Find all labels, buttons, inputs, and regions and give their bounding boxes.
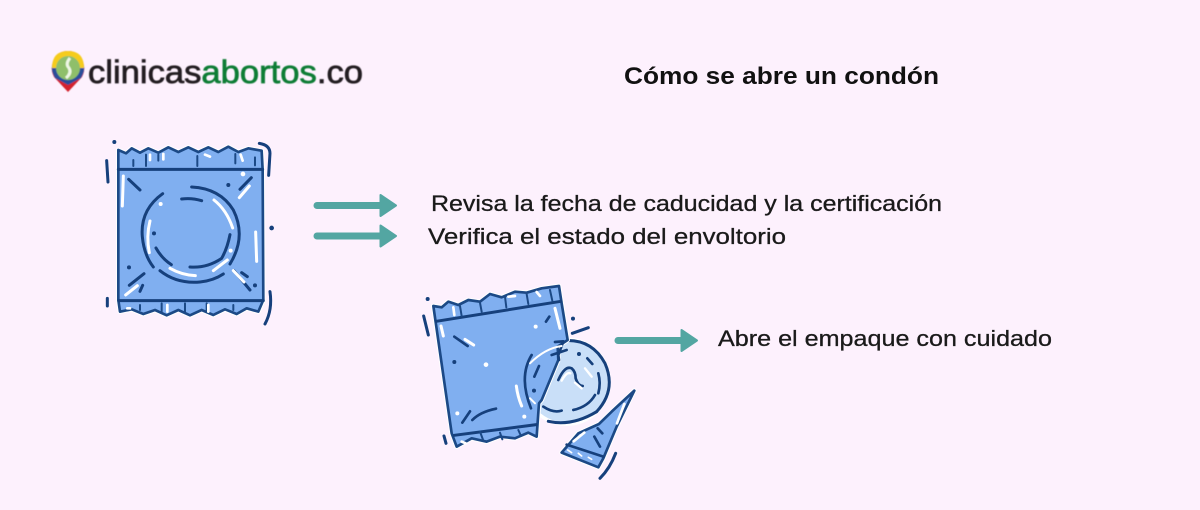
- arrow: estado del envoltorio: [317, 226, 396, 246]
- icon: map pin with Colombian colours: [52, 51, 84, 92]
- arrow: abre el empaque: [618, 330, 697, 351]
- logo: clinicasabortos.co: [52, 51, 363, 92]
- motion marks: [424, 316, 616, 478]
- torn corner: [562, 391, 634, 467]
- text: step 1: Revisa la fecha de caducidad y la certificación: [431, 191, 942, 216]
- logo wordmark: clinicas abortos .co: [88, 54, 363, 90]
- condom disc: [524, 339, 609, 424]
- illustration: sealed condom packet: [107, 140, 274, 324]
- text: step 2: Verifica el estado del envoltorio: [428, 224, 786, 249]
- text: step 3: Abre el empaque con cuidado: [718, 326, 1052, 351]
- illustration: opened condom packet: [424, 286, 634, 478]
- packet body: [433, 286, 581, 447]
- motion marks: [107, 143, 271, 324]
- arrow: fecha de caducidad: [317, 195, 396, 216]
- title: Cómo se abre un condón: [624, 63, 939, 90]
- ring: [129, 178, 251, 291]
